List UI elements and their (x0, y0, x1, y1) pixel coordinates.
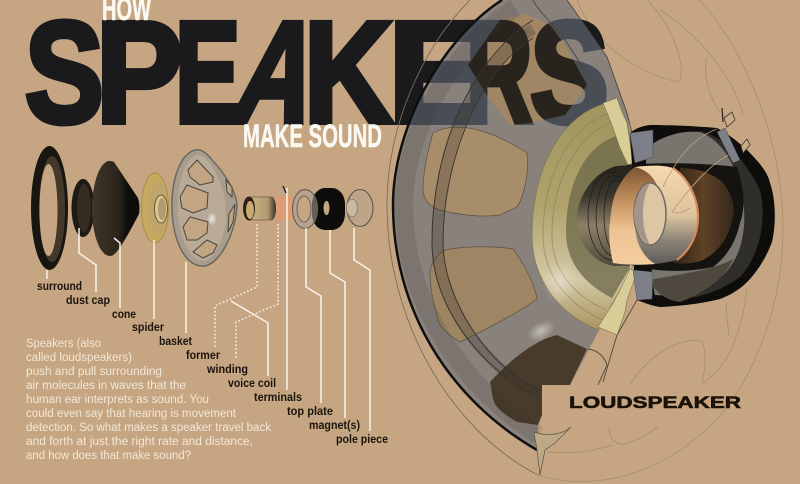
spider section (598, 98, 637, 335)
part: winding (275, 196, 293, 220)
inner pole ellipse (634, 183, 666, 245)
part: basket (172, 150, 237, 266)
intro paragraph: human ear interprets as sound. You (26, 394, 209, 406)
copper edge (673, 168, 698, 260)
cone highlight (542, 260, 578, 304)
terminals and wires (663, 108, 750, 213)
part labels: surround (37, 281, 82, 293)
basket windows tint (423, 14, 587, 425)
part: cone (92, 161, 139, 256)
intro paragraph (26, 338, 271, 462)
bore brown (673, 168, 734, 264)
cone inner dark band (566, 136, 632, 298)
intro paragraph: detection. So what makes a speaker travel back (26, 422, 271, 434)
basket body (393, 0, 634, 450)
part: magnet (312, 188, 345, 230)
basket outer edge (393, 0, 537, 450)
flange section (534, 427, 571, 475)
left inner rings (577, 165, 636, 266)
faint speaker outlines (538, 0, 783, 482)
magnet grey body (645, 132, 744, 295)
part: dust cap (72, 179, 94, 237)
part: spider (142, 173, 168, 243)
label: loudspeaker (542, 385, 741, 415)
basket highlight (524, 316, 558, 346)
intro paragraph: Speakers (also (26, 338, 101, 350)
part: top plate (292, 190, 318, 228)
part labels: voice coil (228, 378, 276, 390)
inner pole shading (634, 183, 650, 245)
part labels: basket (159, 336, 192, 348)
loudspeaker cutaway illustration (387, 0, 775, 475)
intro paragraph: called loudspeakers) (26, 352, 132, 364)
part labels (37, 281, 388, 446)
terminal wire tip (283, 186, 286, 193)
basket inner rim lines (432, 20, 540, 400)
steel brackets (630, 130, 653, 300)
part: pole piece (346, 190, 373, 226)
part labels: terminals (254, 392, 302, 404)
former bright cylinder (609, 166, 698, 265)
intro paragraph: and how does that make sound? (26, 450, 191, 462)
basket side profile (533, 0, 637, 385)
intro paragraph: could even say that hearing is movement (26, 408, 237, 420)
title: make sound: MAKE SOUND (243, 118, 382, 154)
part labels: spider (132, 322, 164, 334)
magnet back (630, 125, 775, 307)
part labels: dust cap (66, 295, 110, 307)
part: former (243, 196, 276, 220)
intro paragraph: push and pull surrounding (26, 366, 162, 378)
part labels: former (186, 350, 220, 362)
copper winding (609, 167, 658, 265)
part labels: winding (206, 364, 248, 376)
leader lines (47, 188, 370, 431)
part labels: pole piece (336, 434, 388, 446)
bore (612, 163, 743, 271)
title: speakers (25, 0, 609, 154)
cone annulus (532, 103, 634, 330)
part labels: magnet(s) (309, 420, 360, 432)
intro paragraph: air molecules in waves that the (26, 380, 186, 392)
intro paragraph: and forth at just the right rate and distance, (26, 436, 253, 448)
magnet dark band (690, 131, 763, 298)
magnet shaded crescent (650, 259, 733, 302)
part labels: cone (112, 309, 136, 321)
part labels: top plate (287, 406, 333, 418)
cone rings (543, 113, 612, 320)
part: surround (31, 146, 68, 270)
outer faint rim line (387, 0, 538, 475)
exploded parts (31, 146, 373, 270)
rim shading (404, 8, 540, 435)
label: loudspeaker: LOUDSPEAKER (569, 393, 741, 412)
